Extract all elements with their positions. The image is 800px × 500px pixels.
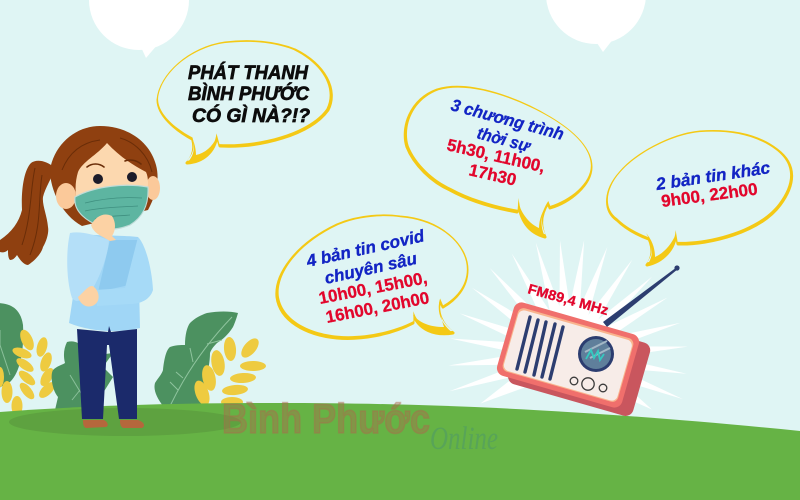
antenna tip bbox=[674, 265, 680, 271]
news text: 3 chương trình bbox=[449, 96, 566, 144]
hand: chest bbox=[78, 286, 99, 307]
radio face bbox=[502, 309, 633, 402]
watermark: Bình Phước Online: Online bbox=[430, 421, 498, 457]
eyebrows bbox=[87, 160, 141, 167]
icon: cloud bubble left bbox=[89, 0, 189, 58]
covid text: chuyên sâu bbox=[323, 249, 419, 288]
shoes bbox=[83, 420, 144, 428]
radio bbox=[495, 265, 680, 418]
plant: left leaf bbox=[0, 303, 23, 390]
speech bubble: news programs bbox=[405, 87, 591, 237]
news text bbox=[445, 96, 566, 190]
news text: thời sự bbox=[475, 124, 534, 156]
dial bbox=[578, 336, 614, 372]
covid text: 4 bản tin covid bbox=[304, 226, 427, 271]
tail thickening bbox=[413, 300, 453, 334]
hair bbox=[50, 126, 158, 226]
ground shadow bbox=[9, 408, 241, 436]
ground bbox=[0, 403, 800, 500]
speaker slats bbox=[517, 317, 563, 379]
question text: CÓ GÌ NÀ?!? bbox=[192, 105, 310, 127]
character: girl bbox=[0, 126, 160, 428]
trousers bbox=[77, 326, 137, 419]
watermark: Bình Phước Online: Bình Phước bbox=[222, 395, 430, 442]
plant: left rice bbox=[0, 328, 58, 416]
plant: middle leaf bbox=[52, 341, 113, 410]
question text: BÌNH PHƯỚC bbox=[188, 83, 309, 105]
plant: right leaf bbox=[154, 312, 238, 406]
antenna bbox=[603, 267, 678, 327]
left upper arm bbox=[67, 232, 109, 301]
speech bubble: covid bulletins bbox=[277, 216, 467, 338]
covid text bbox=[304, 226, 431, 327]
ponytail bbox=[0, 161, 55, 265]
icon: cloud bubble right bbox=[546, 0, 646, 52]
mask bbox=[75, 185, 148, 229]
question text bbox=[188, 62, 310, 127]
right arm bbox=[95, 237, 153, 306]
news text: 5h30, 11h00, bbox=[445, 135, 547, 176]
tail thickening bbox=[187, 132, 217, 163]
tail thickening bbox=[518, 202, 548, 237]
shirt chest panel bbox=[98, 240, 138, 292]
watermark: Bình Phước Online bbox=[222, 395, 498, 457]
tail thickening bbox=[646, 233, 676, 265]
question text: PHÁT THANH bbox=[188, 62, 309, 84]
speech bubble: question bbox=[158, 42, 331, 163]
shirt body bbox=[69, 233, 140, 331]
face bbox=[76, 143, 148, 215]
knobs bbox=[570, 377, 607, 392]
bulletins text: 9h00, 22h00 bbox=[660, 179, 759, 211]
covid text: 10h00, 15h00, bbox=[317, 268, 429, 308]
bulletins text bbox=[654, 158, 772, 211]
speech bubble: other bulletins bbox=[608, 131, 792, 265]
radio side bbox=[506, 309, 652, 418]
bulletins text: 2 bản tin khác bbox=[654, 158, 772, 194]
hand: chin bbox=[91, 214, 116, 241]
news text: 17h30 bbox=[467, 160, 518, 190]
sunburst behind radio bbox=[447, 239, 688, 423]
frequency label: FM89,4 MHz bbox=[526, 280, 610, 318]
ears bbox=[56, 183, 76, 209]
covid text: 16h00, 20h00 bbox=[324, 288, 431, 327]
radio inner border bbox=[501, 307, 635, 403]
dial FM mark bbox=[586, 350, 604, 360]
eyes bbox=[93, 174, 103, 184]
plant: right rice bbox=[191, 335, 266, 407]
radio body bbox=[495, 301, 641, 409]
